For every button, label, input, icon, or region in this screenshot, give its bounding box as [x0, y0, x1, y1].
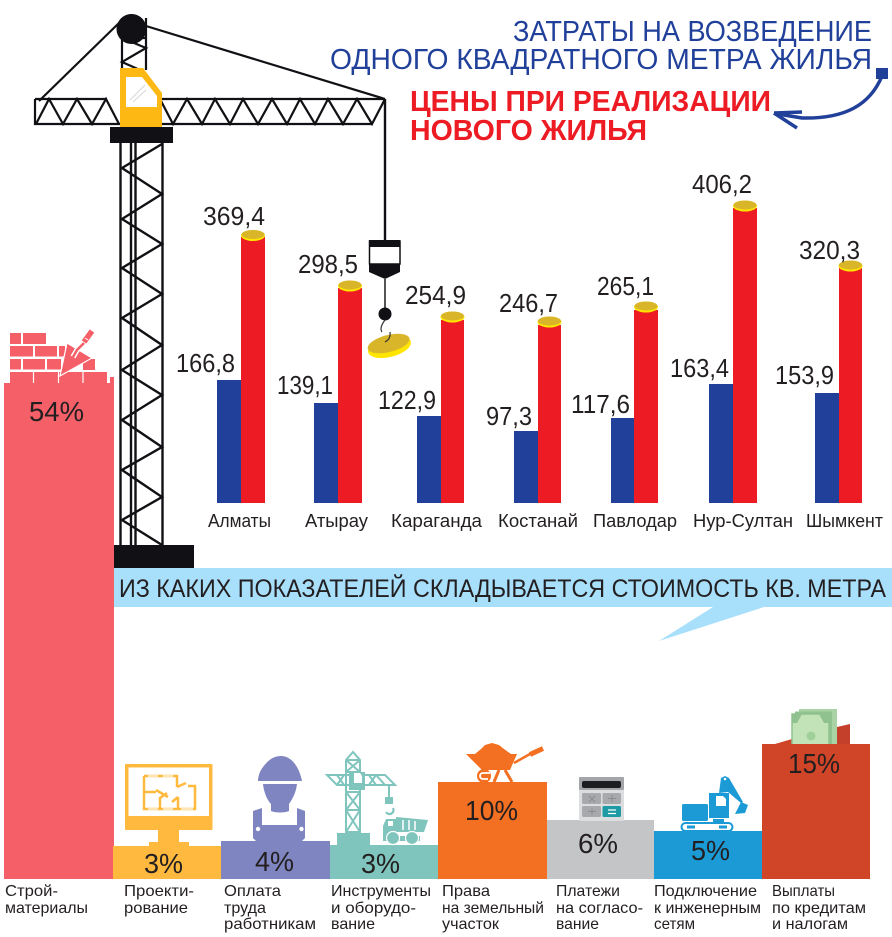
icon: tower crane	[35, 14, 385, 568]
bars: Костанай: 246,7	[499, 290, 558, 318]
bar: labor 4%: 4%	[255, 846, 294, 877]
bar: tools 3%: вание	[331, 916, 375, 933]
bars: Алматы: 369,4	[203, 203, 265, 231]
callout: cost breakdown heading	[114, 568, 892, 641]
arrow: from cost title to price title	[774, 68, 888, 128]
bars: Павлодар: 265,1	[597, 273, 654, 301]
bar: credit and tax payments 15%: Выплаты	[772, 883, 835, 900]
bar: construction materials 54%: материалы	[5, 900, 88, 917]
icon: construction worker	[253, 756, 305, 842]
bars: Караганда: 254,9	[405, 282, 466, 310]
bar: construction materials 54%	[4, 372, 114, 917]
bar: credit and tax payments 15%: по кредитам	[772, 900, 866, 917]
bar: tools 3%: и оборудо-	[331, 900, 416, 917]
bar: approval payments 6%: вание	[556, 916, 599, 933]
bars: Шымкент: 153,9	[775, 362, 834, 390]
bars: Алматы: 166,8	[176, 350, 235, 378]
bar: tools 3%: 3%	[361, 848, 400, 879]
bar: approval payments 6%: Платежи	[556, 883, 620, 900]
icon: calculator	[579, 777, 624, 821]
bar: design 3%: 3%	[144, 848, 183, 879]
bar: labor 4%: Оплата	[224, 883, 281, 900]
bar: approval payments 6%: 6%	[578, 828, 618, 859]
bar: credit and tax payments 15%: и налогам	[772, 916, 848, 933]
crane base	[114, 545, 194, 568]
bar: construction materials 54%: 54%	[29, 396, 84, 427]
bars: Караганда: Караганда	[391, 511, 483, 531]
bar: labor 4%	[221, 841, 330, 933]
crane cab	[120, 68, 162, 127]
bars: Нур-Султан: Нур-Султан	[693, 511, 793, 531]
bar: labor 4%: труда	[224, 900, 266, 917]
bar: credit and tax payments 15%: 15%	[788, 748, 840, 779]
bar: design 3%: рование	[124, 900, 188, 917]
bars: Шымкент	[775, 237, 883, 531]
title: sale prices: НОВОГО ЖИЛЬЯ	[410, 115, 647, 147]
bars: Атырау: 139,1	[277, 372, 333, 400]
title: construction cost: ОДНОГО КВАДРАТНОГО МЕТРА ЖИЛЬЯ	[330, 44, 872, 76]
bars: Костанай	[486, 290, 578, 531]
icon: excavator	[682, 776, 748, 831]
bars: Атырау	[277, 251, 368, 531]
bar: land rights 10%: Права	[442, 883, 490, 900]
crane slab	[110, 127, 173, 143]
bars: Нур-Султан	[670, 171, 793, 531]
bars: Атырау: Атырау	[305, 511, 368, 531]
title: sale prices	[410, 86, 771, 147]
bar: design 3%	[113, 846, 221, 917]
bar: tools 3%	[330, 845, 438, 933]
bars: Алматы: Алматы	[208, 511, 271, 531]
crane jib	[35, 99, 385, 124]
bars: Павлодар: 117,6	[571, 391, 630, 419]
title: sale prices: ЦЕНЫ ПРИ РЕАЛИЗАЦИИ	[410, 86, 771, 118]
bar: land rights 10%: на земельный	[442, 900, 544, 917]
bar: design 3%: Проекти-	[124, 883, 194, 900]
bars: Костанай: Костанай	[498, 511, 578, 531]
bars: Караганда	[378, 282, 483, 531]
bars: Атырау: 298,5	[298, 251, 358, 279]
bar: utility connection 5%: к инженерным	[654, 900, 761, 917]
bars: Костанай: 97,3	[486, 403, 532, 431]
bar: approval payments 6%: на согласо-	[556, 900, 643, 917]
bar: utility connection 5%	[654, 831, 762, 933]
crane pulley	[116, 14, 146, 44]
icon: small crane and truck	[327, 752, 428, 846]
crane top mast	[122, 18, 146, 70]
icon: banknotes and wallet	[775, 709, 850, 745]
bar: approval payments 6%	[547, 820, 654, 933]
bar: construction materials 54%: Строй-	[5, 883, 58, 900]
bar: utility connection 5%: Подключение	[654, 883, 757, 900]
bars: Нур-Султан: 163,4	[670, 355, 729, 383]
bars: Павлодар	[571, 273, 677, 531]
icon: bricks and trowel	[10, 331, 95, 376]
bar: land rights 10%: 10%	[465, 795, 518, 826]
bars: Павлодар: Павлодар	[593, 511, 677, 531]
bars: Нур-Султан: 406,2	[692, 171, 752, 199]
bar chart: cities	[176, 171, 883, 531]
bar: labor 4%: работникам	[224, 916, 316, 933]
title: construction cost	[330, 16, 872, 76]
title: construction cost: ЗАТРАТЫ НА ВОЗВЕДЕНИЕ	[513, 16, 872, 48]
crane tower	[120, 143, 162, 546]
bar: credit and tax payments 15%	[762, 744, 870, 933]
bars: Шымкент: 320,3	[799, 237, 860, 265]
bar: utility connection 5%: 5%	[691, 835, 730, 866]
bars: Шымкент: Шымкент	[806, 511, 883, 531]
icon: wheelbarrow	[466, 743, 543, 783]
bar: land rights 10%: участок	[442, 916, 500, 933]
bars: Алматы	[176, 203, 271, 531]
bar: land rights 10%	[438, 782, 547, 933]
bars: Караганда: 122,9	[378, 387, 436, 415]
bar: utility connection 5%: сетям	[654, 916, 695, 933]
icon: monitor with floor plan	[125, 764, 212, 846]
bar: tools 3%: Инструменты	[331, 883, 431, 900]
crane cables	[39, 22, 385, 101]
icon: crane hook with coin	[365, 99, 413, 362]
